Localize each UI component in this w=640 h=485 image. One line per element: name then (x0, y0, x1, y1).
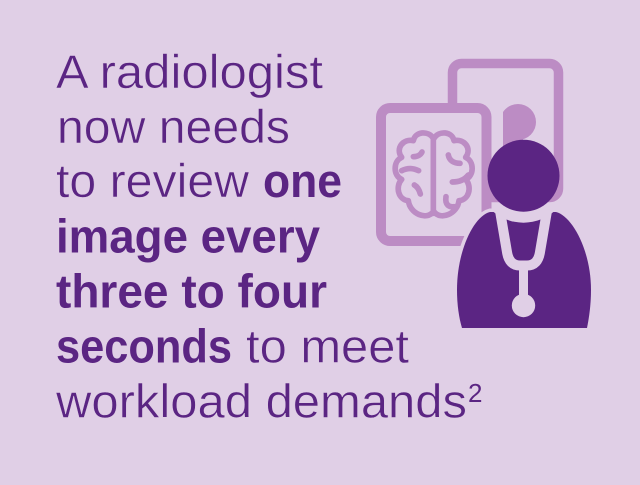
doctor head (488, 140, 560, 212)
headline text: 2 (468, 378, 482, 408)
headline text: workload demands (55, 374, 467, 428)
front scan card (381, 108, 486, 241)
headline text (55, 45, 482, 428)
icon: radiologist with scans (381, 64, 591, 328)
doctor body (457, 208, 591, 328)
headline text: image every (56, 210, 320, 262)
stethoscope (512, 262, 535, 317)
headline text: now needs (57, 100, 290, 153)
icon: brain (395, 133, 472, 216)
headline text: three to four (56, 264, 327, 318)
headline text: to review (56, 154, 250, 207)
back scan card (452, 64, 558, 198)
headline text: one (263, 154, 342, 207)
headline text: to meet (246, 320, 409, 372)
headline text: seconds (56, 320, 232, 372)
headline text: A radiologist (56, 45, 323, 98)
